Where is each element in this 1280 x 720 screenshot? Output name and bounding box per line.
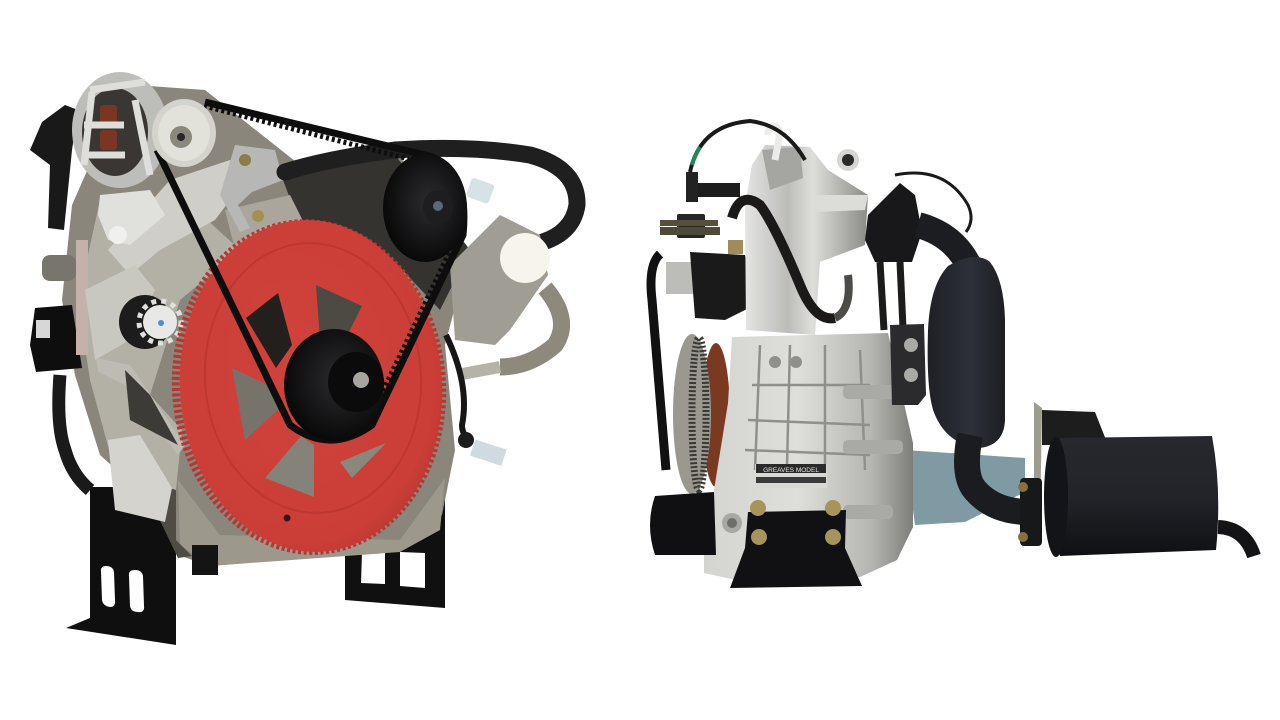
tail pipe — [1218, 527, 1254, 556]
nameplate — [755, 464, 827, 488]
alternator — [72, 72, 168, 245]
left connector — [660, 172, 740, 238]
fuel pump — [450, 177, 550, 345]
harness and sensor — [446, 335, 507, 466]
right engine — [650, 121, 1254, 588]
blue-grey mounting plate — [905, 450, 1025, 525]
ring gear teeth — [165, 214, 453, 560]
upper pulley — [383, 154, 467, 262]
belt — [157, 102, 464, 440]
bottom mount foot — [730, 500, 862, 588]
alternator pulley — [152, 99, 216, 167]
corrugated pipe — [462, 288, 562, 374]
water pump housing — [666, 252, 778, 320]
drive belt — [651, 254, 666, 470]
engine flywheel side — [673, 334, 730, 494]
crankcase — [704, 333, 913, 580]
exhaust manifold — [865, 183, 970, 268]
steel tensioner bracket — [220, 145, 283, 232]
sensor wire right — [895, 173, 971, 232]
front mounting bracket — [345, 478, 445, 608]
flexible hose — [732, 200, 849, 318]
ignition wire — [690, 121, 805, 172]
engine mount bracket — [890, 324, 926, 405]
left engine — [30, 72, 577, 645]
red flywheel — [169, 211, 453, 561]
starter pinion gear — [119, 295, 181, 349]
nameplate: GREAVES MODEL — [763, 467, 819, 474]
rear mounting bracket — [66, 487, 176, 645]
starter cylinder — [650, 492, 742, 555]
primary muffler — [928, 257, 1005, 448]
braided hose — [285, 148, 577, 242]
hose clamp — [728, 240, 743, 254]
flywheel windows — [232, 285, 386, 497]
engine block — [62, 85, 470, 575]
wiring connector — [30, 105, 78, 230]
starter motor — [30, 240, 155, 372]
rubber hoses lower — [880, 262, 903, 330]
muffler mount flange — [1018, 402, 1108, 546]
boss columns — [843, 385, 903, 519]
silencer cylinder — [1044, 436, 1218, 557]
cast ribs — [745, 345, 870, 470]
exhaust elbow pipe — [967, 435, 1024, 512]
coolant hose left — [59, 375, 90, 490]
cylinder and head — [745, 126, 868, 335]
lower pulley — [284, 329, 384, 441]
